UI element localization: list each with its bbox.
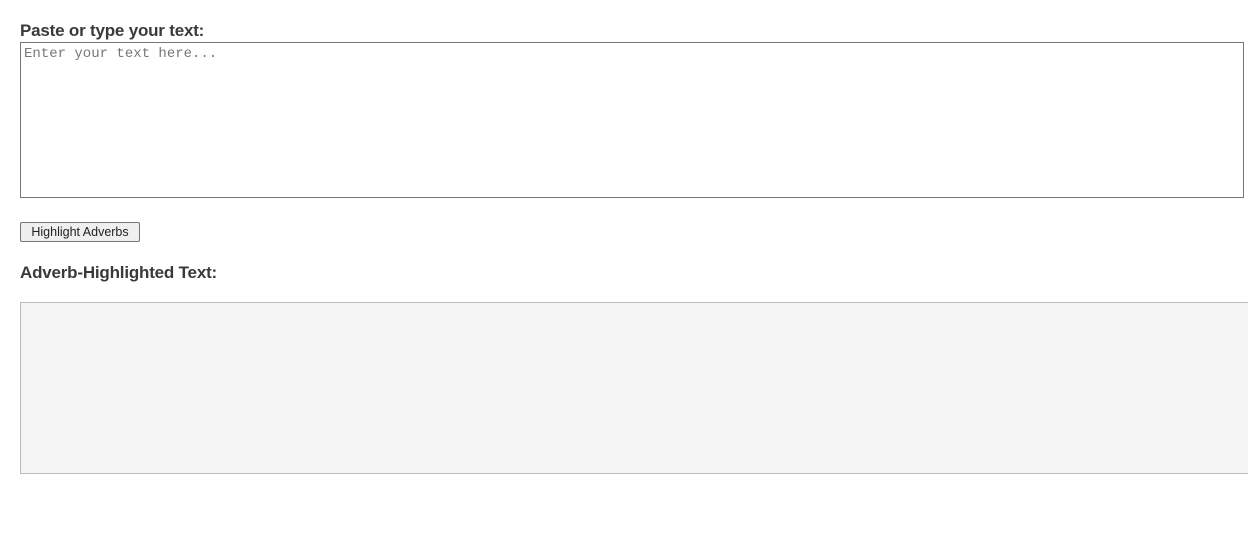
textarea input: Enter your text here...: [24, 46, 217, 62]
heading: output label: Adverb-Highlighted Text:: [20, 263, 217, 282]
textarea input: [20, 42, 1244, 198]
button: highlight adverbs: Highlight Adverbs: [31, 225, 129, 239]
button: highlight adverbs: [20, 222, 140, 242]
output box: [20, 302, 1248, 474]
heading: input label: Paste or type your text:: [20, 21, 204, 40]
